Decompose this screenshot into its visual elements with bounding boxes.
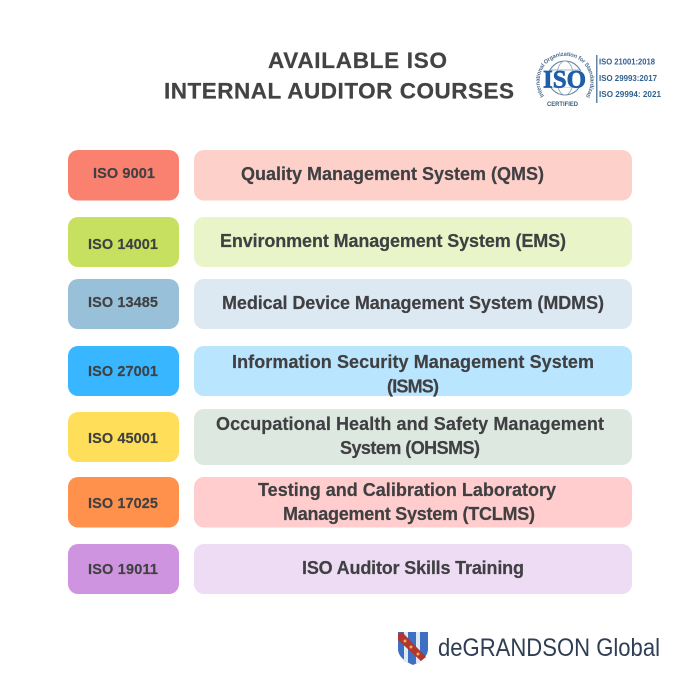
- row: ISO 27001: ISO 27001: [88, 364, 158, 380]
- row: ISO 17025: [68, 477, 632, 528]
- logo: deGRANDSON Global: [398, 632, 660, 665]
- row: ISO 19011: ISO Auditor Skills Training: [302, 558, 524, 578]
- row: ISO 13485: Medical Device Management System (MDMS): [222, 293, 604, 313]
- row: ISO 45001: Occupational Health and Safety Management: [216, 414, 604, 434]
- ISO standards list: ISO 21001:2018: [599, 56, 655, 66]
- row: ISO 19011: ISO 19011: [88, 562, 158, 578]
- row: ISO 14001: ISO 14001: [88, 237, 158, 253]
- row: ISO 27001: [68, 346, 632, 396]
- row: ISO 14001: [68, 217, 632, 267]
- ISO standards list: ISO 29994: 2021: [599, 89, 661, 99]
- row: ISO 9001: ISO 9001: [93, 166, 155, 182]
- row: ISO 17025: Testing and Calibration Laboratory: [258, 480, 556, 500]
- icon: ISO certified badge: ISO: [543, 66, 586, 94]
- logo: deGRANDSON Global: deGRANDSON Global: [438, 634, 660, 662]
- row: ISO 45001: [68, 409, 632, 465]
- title: INTERNAL AUDITOR COURSES: [164, 78, 514, 104]
- row: ISO 27001: (ISMS): [387, 376, 439, 396]
- ISO standards list: ISO 29993:2017: [599, 73, 657, 83]
- row: ISO 27001: Information Security Management System: [232, 352, 594, 372]
- icon: ISO certified badge: CERTIFIED: [547, 101, 578, 108]
- row: ISO 17025: ISO 17025: [88, 496, 158, 512]
- row: ISO 45001: System (OHSMS): [340, 438, 480, 458]
- row: ISO 9001: Quality Management System (QMS): [241, 164, 544, 184]
- ISO standards list: [596, 55, 661, 103]
- row: ISO 9001: [68, 150, 632, 200]
- row: ISO 19011: [68, 544, 632, 594]
- icon: ISO certified badge: [536, 52, 594, 108]
- title: [164, 48, 514, 104]
- title: AVAILABLE ISO: [268, 48, 447, 73]
- row: ISO 13485: [68, 279, 632, 329]
- row: ISO 13485: ISO 13485: [88, 295, 158, 311]
- row: ISO 45001: ISO 45001: [88, 431, 158, 447]
- row: ISO 17025: Management System (TCLMS): [283, 504, 535, 524]
- row: ISO 14001: Environment Management System (EMS): [220, 231, 566, 251]
